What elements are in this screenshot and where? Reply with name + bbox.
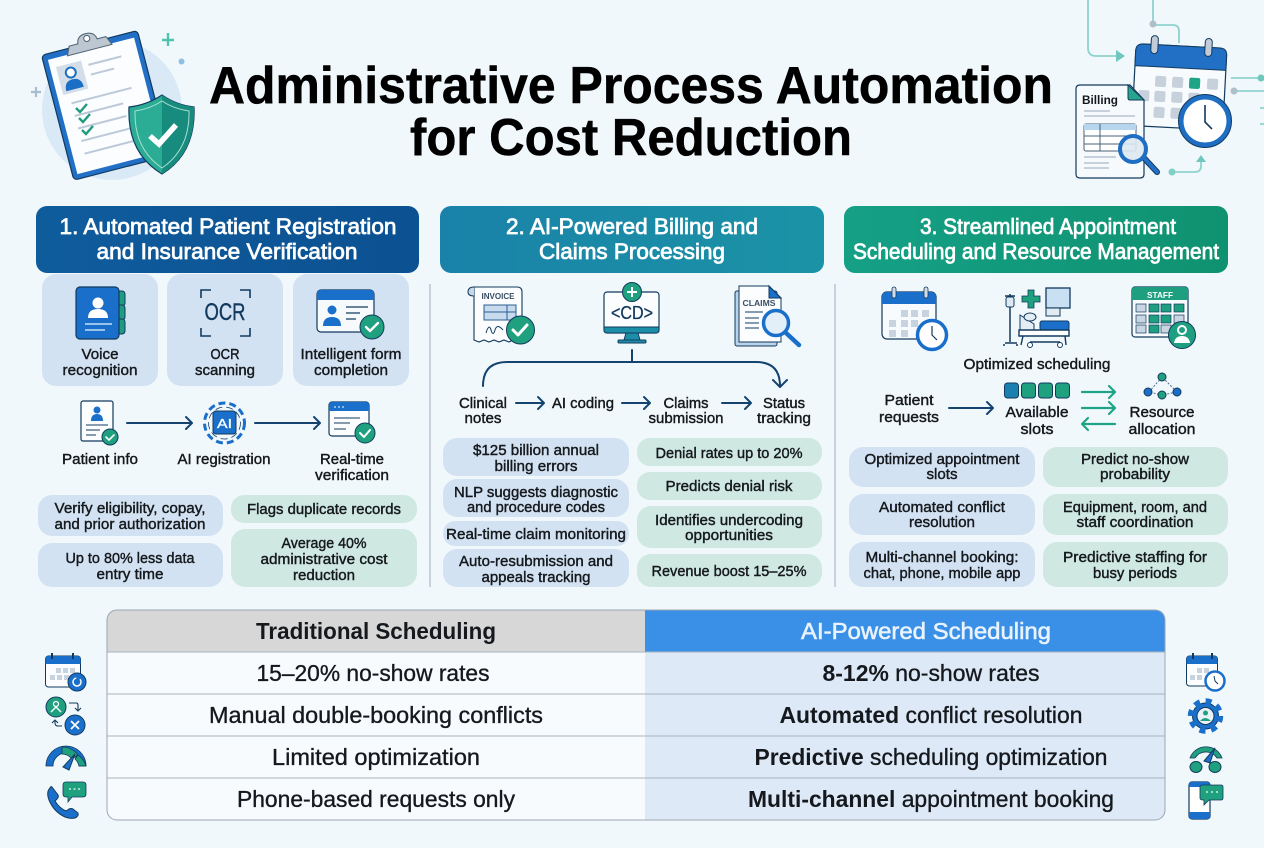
pill: denial risk (637, 472, 822, 500)
flow: real-time verification: Real-time (320, 451, 384, 468)
pill: denial rates (637, 438, 822, 466)
card: OCR scanning (167, 274, 283, 386)
flow: real-time verification: verification (315, 467, 389, 484)
pill: optimized slots: slots (926, 466, 958, 483)
pill: revenue boost: Revenue boost 15–25% (652, 563, 806, 580)
pill: undercoding (637, 506, 822, 548)
icon: billing document, calendar and clock with connectors: Billing (1082, 93, 1118, 107)
pill: multi-channel booking: chat, phone, mobile app (864, 565, 1020, 582)
heading: section 1: and Insurance Verification (96, 239, 358, 264)
pill: auto-resubmission (443, 549, 629, 587)
flow: status tracking: tracking (757, 410, 811, 427)
pill: billing errors: $125 billion annual (473, 442, 599, 459)
pill: verify eligibility (38, 495, 223, 536)
pill: verify eligibility: Verify eligibility, copay, (54, 500, 206, 517)
flow: status tracking: Status (763, 395, 805, 412)
arrow (722, 397, 751, 409)
row 1: 15–20% no-show rates (256, 660, 490, 686)
pill: predictive staffing: busy periods (1093, 565, 1177, 582)
pill: auto-resubmission: Auto-resubmission and (459, 553, 613, 570)
pill: revenue boost (637, 554, 822, 587)
pill: no-show probability: Predict no-show (1081, 451, 1189, 468)
label: optimized scheduling: Optimized scheduling (964, 356, 1110, 373)
pill: conflict resolution (849, 494, 1035, 535)
pill: coordination: staff coordination (1076, 514, 1194, 531)
pill: less data entry: Up to 80% less data (66, 550, 195, 567)
table header: AI-powered: AI-Powered Scheduling (801, 618, 1051, 644)
row 2 (209, 702, 1082, 728)
flow: available slots: slots (1020, 421, 1054, 438)
flow: resource allocation (1128, 373, 1196, 438)
pill: predictive staffing: Predictive staffing for (1063, 549, 1207, 566)
icon: left calendar (46, 653, 86, 691)
card: voice recognition: Voice (82, 346, 118, 363)
table header: traditional: Traditional Scheduling (256, 618, 496, 644)
panel: 1. registration and insurance verification (36, 206, 419, 587)
pill: conflict resolution: Automated conflict (879, 499, 1006, 516)
arrow (516, 397, 544, 409)
pill: multi-channel booking (849, 542, 1035, 587)
row 1 (256, 660, 1040, 686)
icon: right mobile chat (1189, 782, 1223, 819)
pill: billing errors: billing errors (494, 458, 578, 475)
title (209, 57, 1053, 167)
pill: claim monitoring: Real-time claim monitoring (446, 526, 626, 543)
icon: claims (735, 286, 799, 346)
row 2: Manual double-booking conflicts (209, 702, 543, 728)
flow: AI registration: AI registration (178, 451, 270, 468)
pill: billing errors (443, 438, 629, 476)
pill: conflict resolution: resolution (909, 514, 975, 531)
flow: real-time verification (315, 402, 389, 484)
heading: section 1: 1. Automated Patient Registration (60, 214, 396, 239)
card: OCR scanning: OCR (204, 299, 246, 326)
flow: claims submission: Claims (664, 395, 708, 412)
flow: AI registration: AI (217, 416, 232, 431)
card: OCR scanning: OCR (210, 346, 240, 363)
title: for Cost Reduction (410, 109, 852, 167)
heading: section 1 (36, 206, 419, 273)
heading: section 2: 2. AI-Powered Billing and (506, 214, 758, 239)
pill: NLP codes: NLP suggests diagnostic (454, 484, 618, 501)
icon: billing document, calendar and clock with connectors (1076, 0, 1264, 178)
card: intelligent form completion: completion (314, 362, 388, 379)
pill: flags duplicates (231, 495, 417, 523)
pill: flags duplicates: Flags duplicate records (247, 501, 401, 518)
icon: coding monitor: <CD> (611, 303, 653, 323)
pill: multi-channel booking: Multi-channel booking: (866, 549, 1018, 566)
flow: resource allocation: allocation (1128, 421, 1196, 438)
pill: cost reduction: Average 40% (282, 535, 366, 552)
row 4: Phone-based requests only (237, 786, 515, 812)
pill: coordination: Equipment, room, and (1063, 499, 1207, 516)
title: Administrative Process Automation (209, 57, 1053, 115)
card: voice recognition (42, 274, 158, 386)
flow: available slots (1004, 383, 1070, 438)
pill: undercoding: Identifies undercoding (655, 512, 803, 529)
icon: staff schedule (1132, 287, 1196, 348)
flow: AI registration (178, 403, 270, 468)
pill: less data entry (38, 543, 223, 587)
pill: undercoding: opportunities (685, 527, 773, 544)
arrow (949, 402, 993, 414)
table header: AI-powered (645, 610, 1165, 652)
pill: cost reduction (231, 529, 417, 587)
card: voice recognition: recognition (62, 362, 138, 379)
row 2: Automated conflict resolution (780, 702, 1082, 728)
icon: coding monitor (604, 282, 659, 343)
pill: no-show probability: probability (1100, 466, 1171, 483)
icon: invoice (468, 287, 534, 344)
heading: section 3: Scheduling and Resource Management (853, 239, 1219, 264)
row 3 (272, 744, 1108, 770)
arrow (127, 417, 192, 429)
flow: patient requests: requests (879, 409, 939, 426)
icon: staff schedule: STAFF (1147, 290, 1173, 300)
pill: no-show probability (1043, 447, 1228, 487)
icon: left phone and chat (48, 782, 86, 818)
pill: denial risk: Predicts denial risk (666, 478, 793, 495)
icon: calendar with clock (882, 287, 946, 350)
table header: traditional (107, 610, 645, 652)
pill: coordination (1043, 494, 1228, 535)
flow: claims submission (648, 395, 724, 427)
flow: clinical notes: notes (464, 410, 502, 427)
flow: clinical notes (459, 395, 507, 427)
row 3: Limited optimization (272, 744, 480, 770)
panel: 2. billing and claims (440, 206, 824, 587)
flow: patient requests (879, 392, 939, 426)
heading: section 3: 3. Streamlined Appointment (920, 214, 1176, 239)
icon: clipboard with shield (31, 21, 194, 180)
pill: cost reduction: administrative cost (260, 551, 388, 568)
flow: resource allocation: Resource (1130, 404, 1194, 421)
pill: verify eligibility: and prior authorization (54, 516, 205, 533)
pill: predictive staffing (1043, 542, 1228, 587)
arrow (255, 417, 320, 429)
flow: patient requests: Patient (884, 392, 934, 409)
flow: AI coding: AI coding (552, 395, 614, 412)
heading: section 2: Claims Processing (539, 239, 725, 264)
icon: claims: CLAIMS (742, 298, 776, 308)
icon: invoice: INVOICE (482, 292, 515, 301)
icon: right gear (1190, 701, 1220, 731)
pill: claim monitoring (443, 521, 629, 546)
card: intelligent form completion (293, 274, 409, 386)
pill: less data entry: entry time (96, 566, 164, 583)
heading: section 2 (440, 206, 824, 273)
flow: available slots: Available (1006, 404, 1068, 421)
flow: status tracking (757, 395, 811, 427)
pill: optimized slots (849, 447, 1035, 487)
flow: claims submission: submission (648, 410, 724, 427)
flow: clinical notes: Clinical (459, 395, 507, 412)
flow connector (483, 350, 787, 387)
card: intelligent form completion: Intelligent form (300, 346, 402, 363)
pill: auto-resubmission: appeals tracking (482, 569, 590, 586)
pill: cost reduction: reduction (293, 567, 355, 584)
icon: hospital bed with monitor (1003, 288, 1070, 348)
pill: denial rates: Denial rates up to 20% (656, 445, 802, 462)
pill: optimized slots: Optimized appointment (864, 451, 1020, 468)
comparison table (107, 610, 1165, 820)
row 3: Predictive scheduling optimization (754, 744, 1108, 770)
pill: NLP codes: and procedure codes (467, 499, 605, 516)
row 4: Multi-channel appointment booking (748, 786, 1114, 812)
arrow (622, 397, 650, 409)
flow: patient info: Patient info (62, 451, 138, 468)
icon: right gauge (1190, 747, 1222, 772)
pill: NLP codes (443, 479, 629, 517)
icon: left conflict swap (46, 697, 85, 735)
flow: patient info (62, 401, 138, 468)
icon: right calendar with clock (1186, 653, 1224, 690)
arrows: two-way slot to resource exchange (1082, 386, 1115, 430)
panel: 3. scheduling and resources (844, 206, 1228, 587)
row 4 (237, 786, 1114, 812)
icon: left gauge (46, 746, 86, 770)
row 1: 8-12% no-show rates (822, 660, 1040, 686)
card: OCR scanning: scanning (195, 362, 255, 379)
heading: section 3 (844, 206, 1228, 273)
